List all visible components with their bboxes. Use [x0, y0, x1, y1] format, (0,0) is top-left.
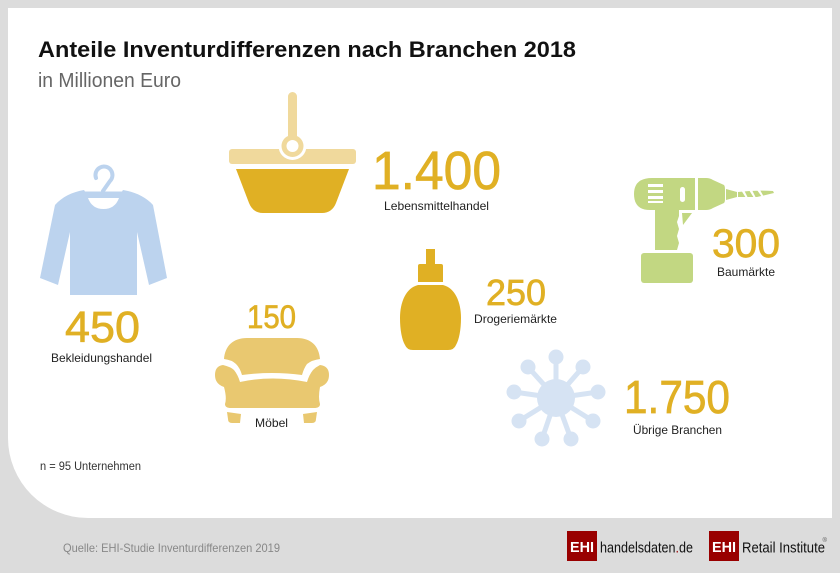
icon: sofa — [215, 338, 329, 423]
logo: EHI Retail Institute: EHI — [712, 540, 736, 556]
sample size note: n = 95 Unternehmen — [40, 461, 141, 473]
item: Drogeriemärkte — [400, 249, 557, 350]
label: Baumärkte — [717, 265, 775, 279]
label: Bekleidungshandel — [51, 351, 152, 365]
icon details — [648, 184, 764, 203]
logo: EHI handelsdaten.de — [567, 531, 693, 561]
label: Drogeriemärkte — [474, 312, 557, 326]
item: Übrige Branchen — [506, 350, 730, 446]
subtitle: in Millionen Euro — [38, 70, 181, 92]
value: 300 — [712, 222, 780, 266]
item: Lebensmittelhandel — [229, 92, 501, 213]
icon: cordless drill — [634, 178, 774, 283]
label: Übrige Branchen — [633, 423, 722, 437]
logo: EHI Retail Institute — [709, 531, 828, 561]
icon: bottle — [400, 249, 461, 350]
label: Lebensmittelhandel — [384, 199, 489, 213]
logo: EHI Retail Institute: Retail Institute — [742, 540, 825, 556]
item: Möbel — [215, 299, 329, 430]
icon: shopping basket — [229, 92, 356, 213]
value: 450 — [65, 303, 140, 352]
item: Bekleidungshandel — [40, 167, 167, 365]
icon: shirt on hanger — [40, 167, 167, 295]
logo: EHI Retail Institute: ® — [822, 537, 828, 544]
logo: EHI handelsdaten.de: handelsdaten.de — [600, 540, 693, 556]
value: 250 — [486, 272, 546, 313]
value: 1.400 — [372, 141, 501, 201]
label: Möbel — [255, 416, 288, 430]
item: Baumärkte — [634, 178, 780, 283]
title: Anteile Inventurdifferenzen nach Branchen 2018 — [38, 37, 576, 62]
value: 1.750 — [624, 371, 730, 423]
source: Quelle: EHI-Studie Inventurdifferenzen 2019 — [63, 541, 280, 555]
icon: network burst — [506, 350, 606, 446]
logo: EHI handelsdaten.de: EHI — [570, 540, 594, 556]
value: 150 — [247, 299, 296, 335]
